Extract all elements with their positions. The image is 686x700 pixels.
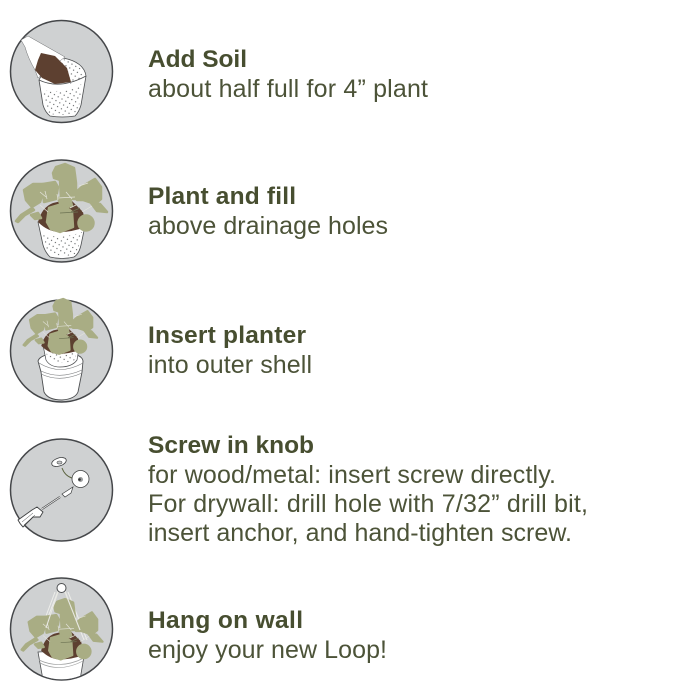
- text: screw in knob detail: For drywall: drill hole with 7/32” drill bit,: [148, 490, 588, 518]
- heading: screw in knob: Screw in knob: [148, 432, 314, 459]
- heading: plant and fill: Plant and fill: [148, 183, 296, 210]
- panel: step 4 screw in knob: [10, 432, 588, 547]
- text: plant and fill detail: above drainage holes: [148, 212, 388, 240]
- text: screw in knob detail: for wood/metal: insert screw directly.: [148, 461, 556, 489]
- panel: step 3 insert planter: [10, 299, 312, 402]
- text: hang on wall detail: enjoy your new Loop!: [148, 636, 387, 664]
- panel: step 1 add soil: [10, 20, 428, 122]
- heading: hang on wall: Hang on wall: [148, 607, 303, 634]
- icon: hanging planter: [10, 578, 112, 680]
- icon: potted plant: [10, 160, 112, 262]
- icon: screwdriver, screw and knob: [10, 439, 112, 541]
- icon: pot being filled with soil: [10, 20, 112, 122]
- panel: step 2 plant and fill: [10, 160, 388, 262]
- heading: add soil: Add Soil: [148, 46, 247, 73]
- text: add soil detail: about half full for 4” plant: [148, 75, 428, 103]
- icon: planter entering outer shell: [10, 299, 112, 402]
- text: screw in knob detail: insert anchor, and hand-tighten screw.: [148, 519, 572, 547]
- text: screw in knob detail: [148, 461, 588, 547]
- heading: insert planter: Insert planter: [148, 322, 306, 349]
- text: insert planter detail: into outer shell: [148, 351, 312, 379]
- panel: step 5 hang on wall: [10, 578, 387, 680]
